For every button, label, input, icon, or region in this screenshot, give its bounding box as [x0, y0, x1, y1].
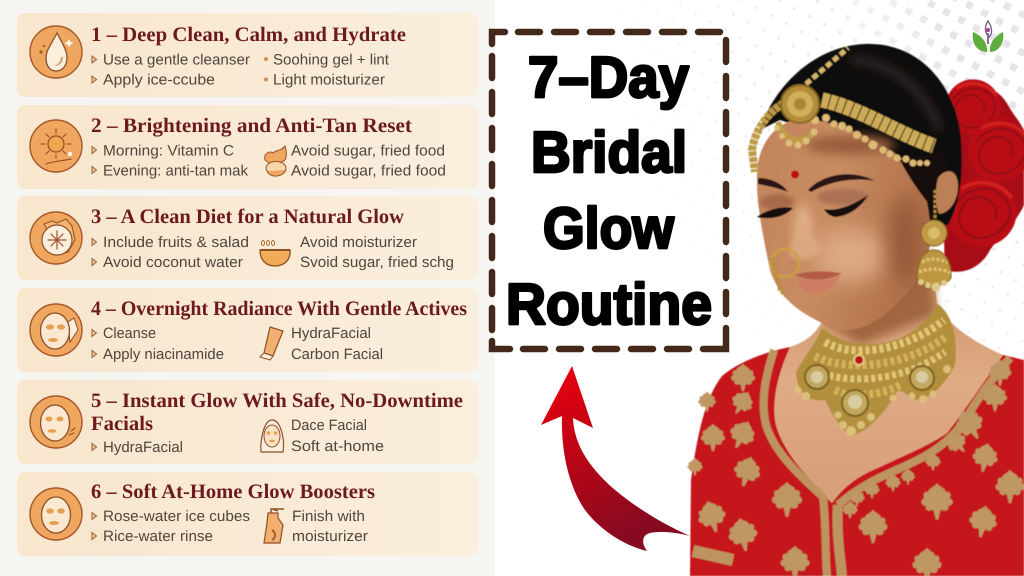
- bullets: step 6 left: Rose-water ice cubes: [103, 508, 250, 525]
- text: step 6 right: Finish with: [292, 508, 365, 525]
- card 3: clean diet: [17, 196, 478, 280]
- text: step 3 right: [300, 234, 454, 271]
- eyebrows: [758, 174, 875, 192]
- bullets: step 1: Light moisturizer: [273, 72, 385, 88]
- bullets: step 2 left: Morning: Vitamin C: [103, 142, 234, 160]
- bullets: step 2 left: [92, 142, 248, 180]
- text: step 2 right: [291, 142, 446, 180]
- bullets: step 4 left: [92, 325, 224, 363]
- text: step 5 right: Dace Facial: [291, 417, 367, 434]
- card 1: deep clean: [17, 13, 478, 97]
- text: step 3 right: Svoid sugar, fried schg: [300, 254, 454, 271]
- icon: face with eye pads: [30, 488, 82, 540]
- ear: [936, 171, 958, 214]
- text: step 2 right: Avoid sugar, fried food: [291, 142, 445, 160]
- icon: face mask: [30, 396, 82, 448]
- heading: step 3: 3 – A Clean Diet for a Natural Glow: [91, 206, 404, 228]
- maang tikka headpiece: [752, 48, 934, 172]
- text: step 6 right: [292, 508, 368, 545]
- text: step 4 right: [291, 325, 383, 363]
- bullets: step 4 left: Cleanse: [103, 325, 156, 342]
- gold necklace: [794, 304, 956, 436]
- icon: citrus slice: [30, 212, 82, 264]
- card 4: overnight radiance: [17, 288, 478, 372]
- card 6: at-home boosters: [17, 472, 478, 556]
- text: step 4 right: HydraFacial: [291, 325, 371, 342]
- icon: woman with mask: [261, 420, 284, 452]
- icon: cream tube: [260, 327, 283, 360]
- bullets: step 4 left: Apply niacinamide: [103, 346, 224, 363]
- bullets: step 1: Apply ice-ccube: [103, 72, 215, 88]
- gold neckline borders: [764, 350, 827, 576]
- bullets: step 1: [92, 52, 390, 88]
- bullets: step 6 left: [92, 508, 250, 545]
- bullets: step 3 left: [92, 234, 249, 271]
- heading: step 4: 4 – Overnight Radiance With Gentle Actives: [91, 298, 467, 320]
- face highlights: [794, 135, 920, 285]
- icon: pump bottle: [264, 509, 284, 543]
- bullets: step 6 left: Rice-water rinse: [103, 528, 213, 545]
- chain to crown: [806, 48, 848, 84]
- hair shine: [850, 60, 940, 130]
- heading: step 1: 1 – Deep Clean, Calm, and Hydrate: [91, 24, 406, 46]
- icon: bowl: [260, 240, 290, 266]
- hair: [760, 44, 962, 225]
- heading: step 5: [91, 390, 463, 435]
- roses in hair: [940, 79, 1024, 272]
- icon: water drop: [30, 26, 82, 78]
- crescent pearls: [778, 122, 815, 140]
- hanging pearls: [822, 114, 930, 166]
- icon: sheet mask: [30, 304, 82, 356]
- pearls: [794, 365, 951, 436]
- face: [757, 118, 930, 330]
- panel: left steps column: [0, 0, 495, 576]
- text: step 2 right: Avoid sugar, fried food: [291, 162, 446, 180]
- red blouse: [687, 347, 1024, 576]
- central medallion: [781, 85, 819, 123]
- nose shadow: [789, 218, 822, 259]
- bullets: step 1: Soohing gel + lint: [273, 52, 390, 68]
- heading: step 2: 2 – Brightening and Anti-Tan Reset: [91, 115, 412, 137]
- neck shadow: [825, 255, 935, 345]
- lashes: [757, 195, 868, 218]
- bullets: step 1: Use a gentle cleanser: [103, 52, 250, 68]
- bullet: step 5 left: HydraFacial: [103, 439, 183, 456]
- photo: bride: [687, 44, 1024, 576]
- chest and neck skin: [774, 250, 1003, 503]
- bullets: step 3 left: Include fruits & salad: [103, 234, 249, 251]
- title box: dashed frame: [492, 32, 726, 349]
- text: step 4 right: Carbon Facial: [291, 346, 383, 363]
- arrow: red curved arrow pointing to title: [541, 366, 690, 551]
- icon: food bowl: [265, 146, 286, 176]
- side chain left: [752, 103, 784, 172]
- logo: green hands: [973, 21, 1003, 52]
- title: Bridal: [531, 120, 687, 185]
- heading: step 6: 6 – Soft At-Home Glow Boosters: [91, 481, 375, 503]
- heading: step 5: Facials: [91, 413, 153, 435]
- background: right white with halftone pattern: [679, 0, 1024, 357]
- text: step 5 right: Soft at-home: [291, 438, 384, 455]
- pendant band right: [822, 100, 934, 146]
- embroidered motifs: [687, 360, 1024, 576]
- earring: [917, 190, 951, 292]
- lips: [795, 271, 842, 293]
- text: step 6 right: moisturizer: [292, 528, 368, 545]
- title: Glow: [543, 196, 675, 261]
- bullets: step 2 left: Evening: anti-tan mak: [103, 162, 248, 180]
- title: [506, 45, 712, 337]
- title: 7–Day: [528, 45, 689, 110]
- icon: sun: [30, 120, 82, 172]
- eyelids: [760, 189, 869, 210]
- nose ring: [771, 249, 799, 277]
- sleeve band: [693, 551, 733, 560]
- necklace rosettes: [805, 365, 829, 389]
- text: step 3 right: Avoid moisturizer: [300, 234, 417, 251]
- heading: step 5: 5 – Instant Glow With Safe, No-Downtime: [91, 390, 463, 412]
- card 2: brightening: [17, 105, 478, 189]
- text: step 5 right: [291, 417, 384, 455]
- hair behind ear: [900, 150, 955, 215]
- bindi: [791, 170, 799, 178]
- title: Routine: [506, 272, 712, 337]
- bullets: step 3 left: Avoid coconut water: [103, 254, 243, 271]
- card 5: instant glow: [17, 380, 478, 464]
